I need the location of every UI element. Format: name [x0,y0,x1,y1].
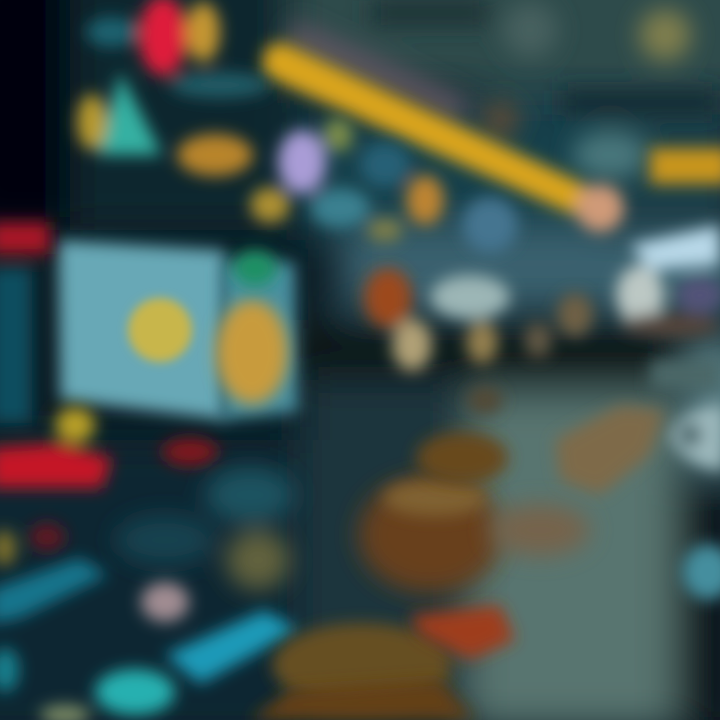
yellow banner [262,42,720,232]
left edge panel and red bands [0,222,218,566]
upper right highlights [285,0,720,179]
top left colourful shapes [77,0,518,253]
cyan light bars [0,558,298,720]
lower left teal shapes [115,467,295,590]
right side lights [650,360,720,600]
big light-blue panel [58,240,298,420]
shelf items row [364,225,720,414]
brown bowls [250,405,665,720]
